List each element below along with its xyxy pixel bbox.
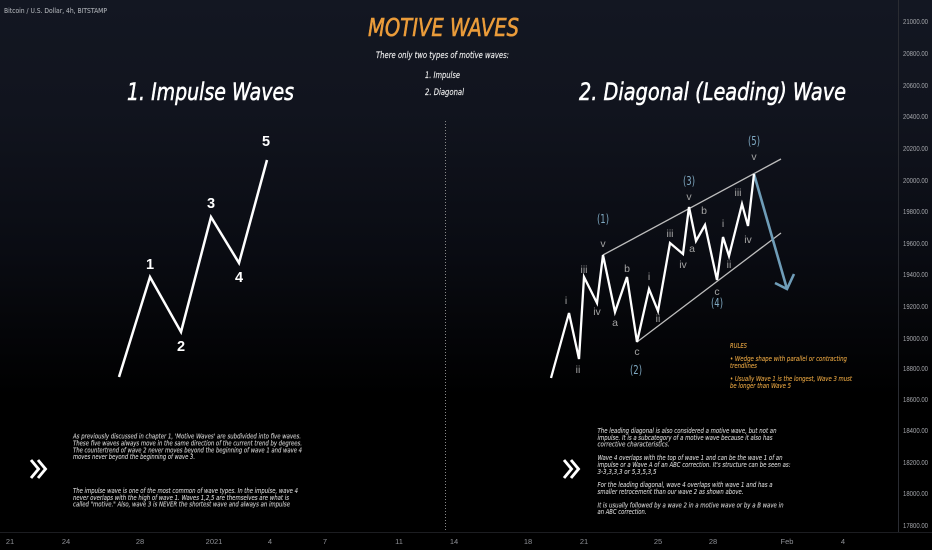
diagonal wave chart (551, 133, 794, 378)
left text block: The countertrend of wave 2 never moves beyond the beginning of wave 1 and wave 4 (73, 446, 302, 454)
time axis: Feb (781, 537, 793, 546)
minor labels: b (701, 205, 707, 217)
impulse wave chart: 2 (177, 339, 185, 355)
left text block: moves never beyond the beginning of wave 3. (73, 453, 195, 461)
intro text (376, 51, 509, 98)
minor labels: iii (734, 187, 742, 199)
minor labels (565, 151, 757, 376)
time axis: 4 (841, 537, 845, 546)
title: MOTIVE WAVES (368, 13, 519, 42)
major labels: (4) (711, 295, 723, 310)
minor labels: iv (593, 306, 602, 318)
minor labels: iii (666, 228, 674, 240)
time axis: 18 (524, 537, 532, 546)
major labels: (3) (683, 173, 695, 188)
heading: impulse waves: 1. Impulse Waves (127, 78, 294, 106)
intro text: 1. Impulse (425, 71, 460, 81)
time axis: 28 (136, 537, 144, 546)
rules: be longer than Wave 5 (730, 382, 791, 390)
heading: diagonal wave: 2. Diagonal (Leading) Wave (579, 78, 846, 106)
time axis: 21 (580, 537, 588, 546)
impulse wave chart: 4 (235, 270, 243, 286)
time axis: 25 (654, 537, 662, 546)
minor labels: v (600, 238, 606, 250)
major labels: (5) (748, 133, 760, 148)
major labels: (2) (630, 362, 642, 377)
minor labels: ii (576, 364, 580, 376)
right text block: The leading diagonal is also considered a motive wave, but not an (598, 427, 776, 435)
minor labels: i (565, 295, 567, 307)
right text block: 3-3,3,3,3 or 5,3,5,3,5 (598, 468, 656, 476)
wave path (551, 174, 754, 378)
left text block: The impulse wave is one of the most common of wave types. In the impulse, wave 4 (73, 487, 298, 495)
chart symbol header: Bitcoin / U.S. Dollar, 4h, BITSTAMP (4, 6, 107, 15)
time axis: 28 (709, 537, 717, 546)
reversal arrow (754, 174, 794, 289)
minor labels: iii (580, 264, 588, 276)
icon: right chevrons (564, 460, 578, 478)
time axis: 7 (323, 537, 327, 546)
major labels (597, 133, 760, 377)
minor labels: v (751, 151, 757, 163)
minor labels: v (686, 191, 692, 203)
minor labels: ii (656, 313, 660, 325)
right text block: corrective characteristics. (598, 440, 670, 448)
impulse wave chart: 5 (262, 134, 270, 150)
right text block: For the leading diagonal, wave 4 overlaps with wave 1 and has a (598, 481, 772, 489)
right text block: an ABC correction. (598, 508, 646, 516)
minor labels: i (722, 218, 724, 230)
time axis: 4 (268, 537, 272, 546)
impulse wave chart (119, 134, 270, 377)
rules (730, 342, 852, 390)
minor labels: a (612, 317, 618, 329)
minor labels: i (648, 271, 650, 283)
minor labels: a (689, 243, 695, 255)
time axis (6, 537, 845, 546)
rules: trendlines (730, 362, 757, 370)
left text block: called "motive." Also, wave 3 is NEVER the shortest wave and always an impulse (73, 500, 290, 508)
rules: RULES (730, 342, 747, 350)
time axis: 11 (395, 537, 403, 546)
time axis: 14 (450, 537, 458, 546)
minor labels: iv (744, 234, 753, 246)
right text block: impulse. It is a subcategory of a motive wave because it also has (598, 434, 773, 442)
rules: • Usually Wave 1 is the longest, Wave 3 must (730, 375, 852, 383)
trendlines (603, 159, 781, 342)
major labels: (1) (597, 211, 609, 226)
right text block: smaller retrocement than our wave 2 as shown above. (598, 488, 744, 496)
right text block (598, 427, 790, 516)
intro text: There only two types of motive waves: (376, 51, 509, 61)
right text block: It is usually followed by a wave 2 in a motive wave or by a B wave in (598, 502, 784, 510)
time axis: 24 (62, 537, 70, 546)
left text block (72, 432, 302, 508)
right text block: Wave 4 overlaps with the top of wave 1 and can be the wave 1 of an (598, 454, 782, 462)
minor labels: ii (727, 259, 731, 271)
minor labels: c (634, 346, 640, 358)
right text block: impulse or a Wave A of an ABC correction. It's structure can be seen as: (598, 461, 790, 469)
price axis (903, 17, 928, 530)
impulse wave chart: 1 (146, 257, 154, 273)
impulse wave chart: 3 (207, 196, 215, 212)
left text block: These five waves always move in the same direction of the current trend by degrees. (73, 440, 302, 448)
rules: • Wedge shape with parallel or contracting (730, 355, 847, 363)
intro text: 2. Diagonal (425, 88, 464, 98)
minor labels: c (714, 286, 720, 298)
left text block: never overlaps with the high of wave 1. Waves 1,2,5 are themselves are what is (73, 494, 289, 502)
minor labels: iv (679, 259, 688, 271)
time axis: 2021 (206, 537, 222, 546)
icon: left chevrons (31, 460, 46, 478)
minor labels: b (624, 263, 630, 275)
left text block: As previously discussed in chapter 1, 'Motive Waves' are subdivided into five waves. (72, 432, 301, 440)
time axis: 21 (6, 537, 14, 546)
